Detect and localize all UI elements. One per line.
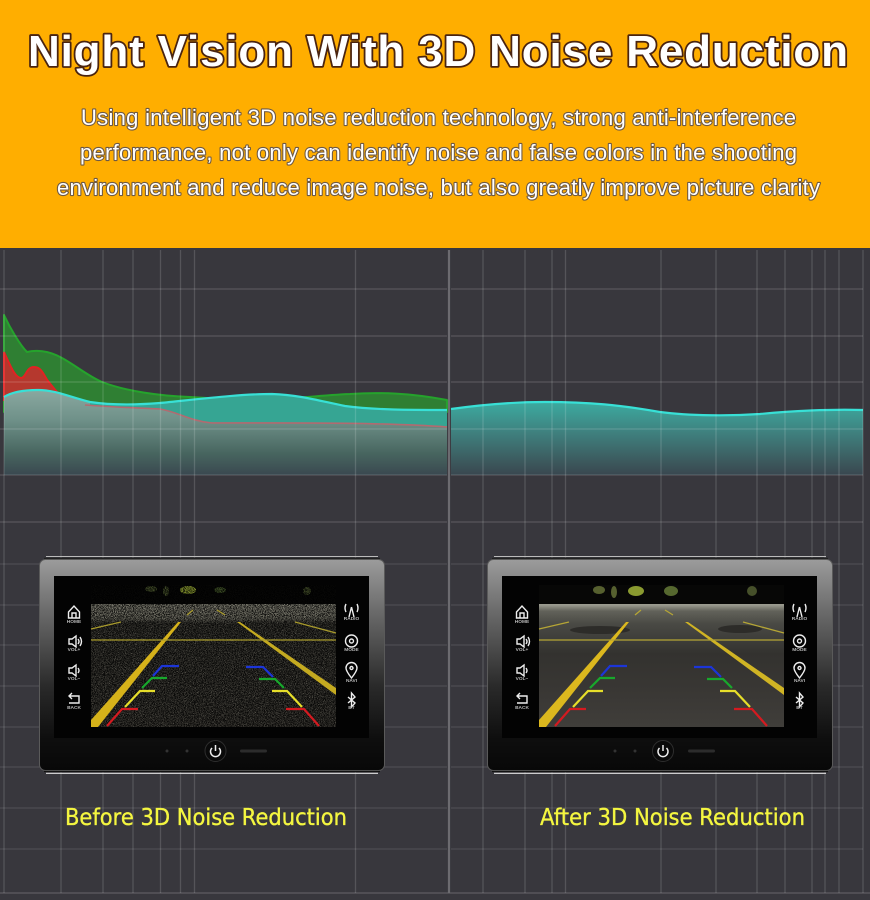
- chart: before noise reduction waveform: [4, 315, 447, 475]
- black screen: [54, 576, 369, 738]
- signal fill: [4, 390, 447, 475]
- grid lines: [0, 250, 870, 893]
- description text: performance, not only can identify noise and false colors in the shooting: [80, 140, 797, 165]
- chart: after noise reduction waveform: [451, 402, 863, 475]
- right menu icons: MODE: [344, 647, 359, 653]
- cyan signal line: [451, 402, 863, 415]
- monitor body: [488, 556, 832, 773]
- right menu icons: [344, 604, 359, 711]
- left menu icons: VOL+: [516, 647, 529, 653]
- left menu icons: [515, 606, 530, 711]
- description text: Using intelligent 3D noise reduction technology, strong anti-interference: [81, 105, 796, 130]
- signal fill: [451, 402, 863, 475]
- right menu icons: [792, 604, 807, 711]
- left menu icons: BACK: [67, 705, 81, 711]
- right menu icons: RADIO: [792, 616, 807, 622]
- cyan signal line: [4, 390, 447, 410]
- header band: [0, 0, 870, 248]
- black screen: [502, 576, 817, 738]
- power button and indicators: [614, 740, 715, 762]
- monitor: before: [40, 556, 384, 773]
- left menu icons: HOME: [515, 619, 530, 625]
- red noise area: [4, 352, 58, 400]
- caption: after: After 3D Noise Reduction: [540, 805, 805, 831]
- power button and indicators: [166, 740, 267, 762]
- right menu icons: NAVI: [346, 678, 358, 684]
- description text: [57, 105, 820, 200]
- right menu icons: NAVI: [794, 678, 806, 684]
- monitor: after: [488, 556, 832, 773]
- left menu icons: BACK: [515, 705, 529, 711]
- title: Night Vision With 3D Noise Reduction: [28, 27, 848, 76]
- monitor body: [40, 556, 384, 773]
- left menu icons: HOME: [67, 619, 82, 625]
- noisy camera view: [91, 585, 336, 727]
- red residual line: [85, 405, 447, 427]
- dark grid background: [0, 249, 870, 900]
- left menu icons: VOL−: [516, 676, 529, 682]
- right menu icons: BT: [348, 705, 355, 711]
- right menu icons: BT: [796, 705, 803, 711]
- description text: environment and reduce image noise, but also greatly improve picture clarity: [57, 175, 820, 200]
- right menu icons: RADIO: [344, 616, 359, 622]
- clean camera view: [539, 585, 784, 727]
- green noise area: [4, 315, 447, 412]
- right menu icons: MODE: [792, 647, 807, 653]
- left menu icons: VOL+: [68, 647, 81, 653]
- left menu icons: [67, 606, 82, 711]
- teal band under signal: [90, 394, 447, 426]
- caption: before: Before 3D Noise Reduction: [65, 805, 347, 831]
- left menu icons: VOL−: [68, 676, 81, 682]
